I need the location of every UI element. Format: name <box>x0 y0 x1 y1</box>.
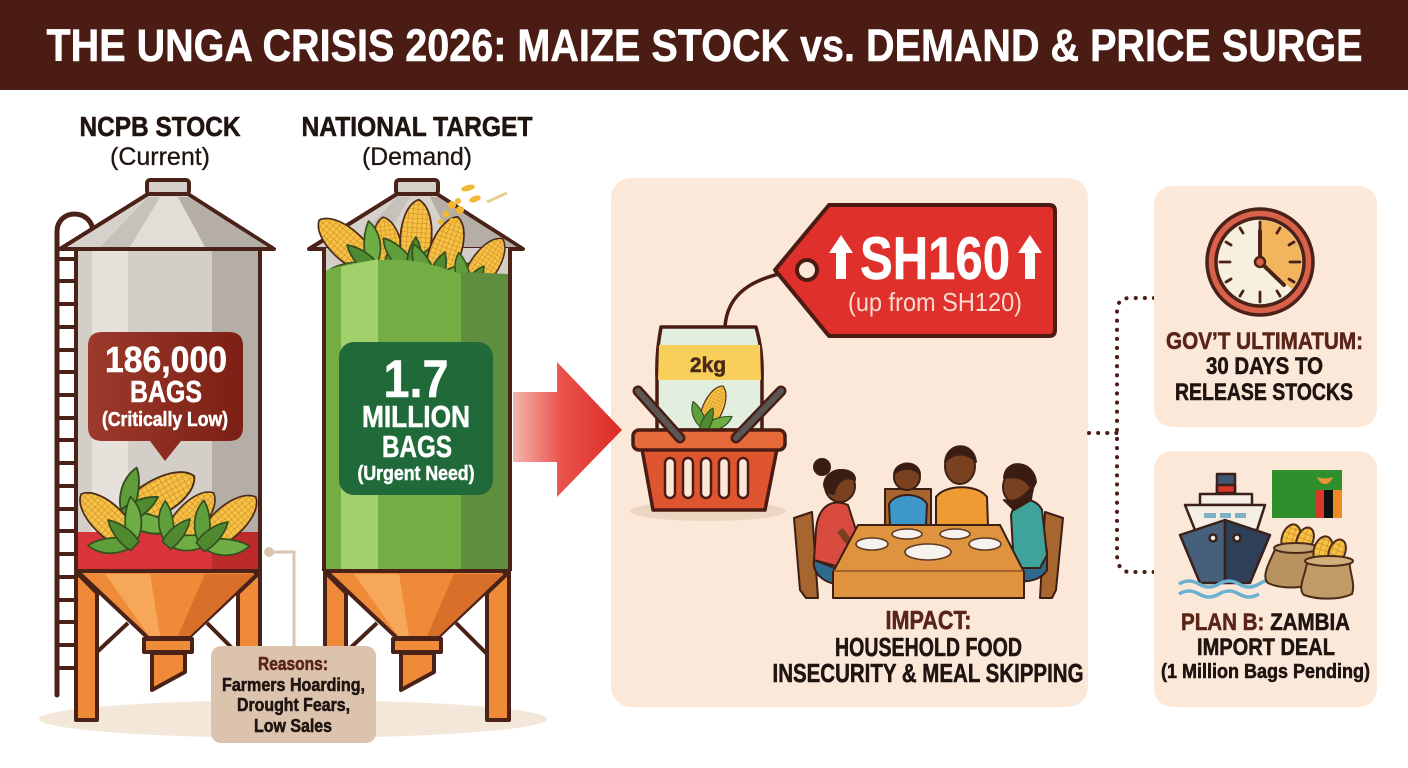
heading: NCPB stock <box>80 111 240 171</box>
heading: national target: (Demand) <box>362 143 472 171</box>
ladder <box>57 214 93 695</box>
impact text: IMPACT: <box>886 605 972 635</box>
reasons box: Reasons: <box>258 654 328 674</box>
callout: 1.7 million bags: BAGS <box>382 429 452 464</box>
maize pile <box>59 445 277 571</box>
callout: 186,000 bags: (Critically Low) <box>102 409 228 431</box>
arrow: stock to price surge <box>513 362 622 497</box>
reasons connector <box>264 547 294 648</box>
ground shadow under silos <box>39 700 547 738</box>
dotted connector to response panels <box>1089 298 1154 572</box>
silo 2: national target <box>298 180 526 720</box>
table <box>833 525 1024 598</box>
overflowing maize <box>298 196 526 309</box>
reasons box: Low Sales <box>254 716 332 736</box>
low stock level <box>76 532 260 571</box>
icon: maize sacks <box>1265 522 1353 599</box>
panel: price and impact <box>611 178 1088 707</box>
price tag: SH160 <box>860 225 1010 292</box>
spilling kernels <box>438 183 507 225</box>
heading: NCPB stock: (Current) <box>110 143 210 171</box>
ultimatum text <box>1166 328 1363 406</box>
heading: national target <box>302 111 532 171</box>
callout: 186,000 bags: BAGS <box>130 374 202 409</box>
basket shadow <box>630 501 786 521</box>
price tag string <box>725 270 800 327</box>
ultimatum text: 30 DAYS TO <box>1206 353 1323 380</box>
ultimatum text: GOV’T ULTIMATUM: <box>1166 328 1363 355</box>
plan B text <box>1161 609 1370 683</box>
woman <box>814 459 862 584</box>
silo body <box>76 249 260 571</box>
callout: 1.7 million bags: 1.7 <box>384 350 448 409</box>
header banner <box>0 0 1408 90</box>
silo 1: NCPB stock <box>57 180 277 720</box>
impact text <box>772 605 1084 688</box>
price tag <box>775 205 1055 336</box>
father <box>1003 464 1047 581</box>
impact text: INSECURITY & MEAL SKIPPING <box>772 658 1084 688</box>
plates <box>856 529 1001 560</box>
callout: 186,000 bags: 186,000 <box>105 339 227 380</box>
shopping basket <box>633 391 785 510</box>
unga bag: 2kg <box>690 354 726 377</box>
family at table with empty plates <box>794 446 1063 598</box>
callout: 1.7 million bags: (Urgent Need) <box>358 463 474 485</box>
icon: clock <box>1207 209 1313 315</box>
panel: plan B <box>1154 451 1377 707</box>
impact text: HOUSEHOLD FOOD <box>835 632 1022 662</box>
ultimatum text: RELEASE STOCKS <box>1175 379 1353 406</box>
reasons box: Farmers Hoarding, <box>222 675 365 695</box>
icon: cargo ship <box>1180 474 1270 583</box>
heading: national target: NATIONAL TARGET <box>302 111 532 142</box>
green demand fill <box>325 260 510 571</box>
hopper and legs <box>76 571 260 720</box>
older son <box>936 446 988 526</box>
callout: 186,000 bags <box>88 332 243 461</box>
chairs <box>794 489 1063 598</box>
unga bag <box>657 327 762 439</box>
reasons box <box>211 646 376 743</box>
plan B text: IMPORT DEAL <box>1197 634 1335 661</box>
callout: 1.7 million bags <box>339 342 493 495</box>
icon: waves <box>1179 581 1271 597</box>
callout: 1.7 million bags: MILLION <box>362 399 470 434</box>
child <box>889 464 927 526</box>
plan B text: (1 Million Bags Pending) <box>1161 661 1370 683</box>
reasons box: Drought Fears, <box>237 695 350 715</box>
price tag: (up from SH120) <box>848 287 1022 317</box>
icon: Zambia flag <box>1272 470 1342 518</box>
plan B text: PLAN B: ZAMBIA <box>1181 609 1350 636</box>
roof <box>60 180 274 249</box>
heading: NCPB stock: NCPB STOCK <box>80 111 240 142</box>
hopper and legs <box>325 571 509 720</box>
roof <box>309 180 523 249</box>
panel: government ultimatum <box>1154 186 1377 427</box>
